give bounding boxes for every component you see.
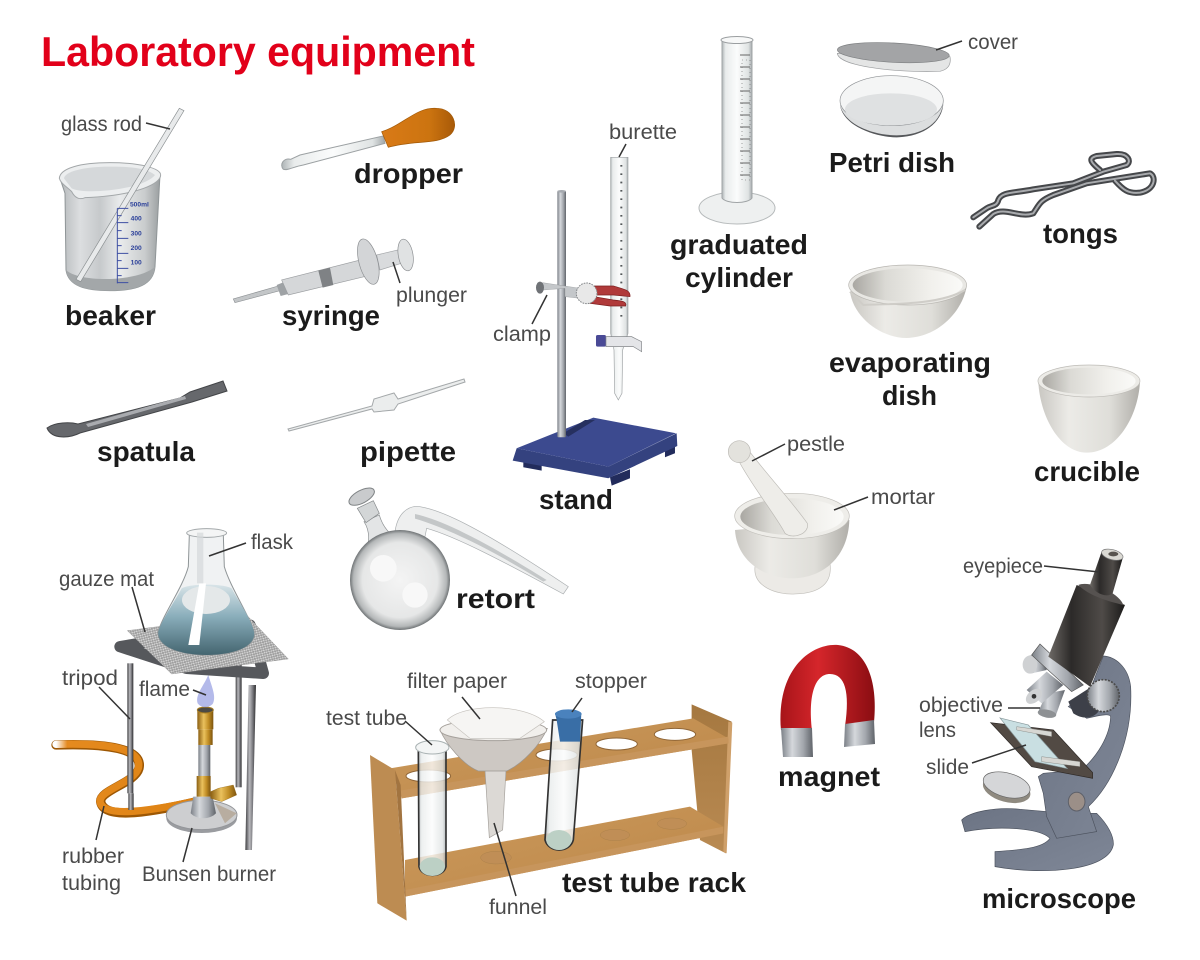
label: retort: retort	[456, 583, 535, 614]
icon: spatula	[47, 381, 227, 437]
label: gauze mat: gauze mat	[59, 568, 154, 591]
icon: Petri dish	[837, 40, 950, 137]
panel: tongs	[973, 154, 1154, 249]
nosepiece	[1032, 644, 1083, 692]
panel: pipette	[288, 379, 465, 467]
icon: horseshoe magnet	[781, 645, 875, 757]
label: burette	[609, 121, 677, 157]
icon: microscope	[962, 547, 1131, 871]
label: microscope: microscope	[982, 883, 1136, 914]
label: filter paper	[407, 670, 507, 719]
panel: evaporating dish	[829, 265, 991, 411]
label: Bunsen burner	[142, 828, 276, 886]
icon: crucible	[1038, 365, 1140, 453]
panel: spatula	[47, 381, 227, 467]
label: mortar	[834, 486, 935, 510]
icon: graduated cylinder	[699, 36, 775, 224]
test tube	[416, 741, 449, 876]
label: objective lens: objective	[919, 694, 1003, 717]
label: rubber tubing: rubber	[62, 845, 124, 868]
back tripod leg	[236, 663, 242, 787]
label: tripod: tripod	[62, 667, 118, 690]
label: graduated cylinder: graduated	[670, 229, 808, 260]
stage	[991, 718, 1093, 778]
label: beaker: beaker	[65, 300, 156, 331]
panel: burner, tripod and flask	[56, 529, 293, 895]
focus knob	[1087, 680, 1119, 712]
label: flask: flask	[251, 531, 293, 554]
burner tube	[197, 707, 237, 802]
panel: Petri dish	[829, 31, 1018, 178]
panel: beaker	[59, 108, 184, 331]
funnel and filter paper	[440, 708, 547, 838]
label: plunger: plunger	[396, 284, 467, 307]
label: syringe: syringe	[282, 300, 380, 331]
label: pestle: pestle	[787, 433, 845, 456]
label: mortar: mortar	[871, 486, 935, 509]
flask	[158, 529, 254, 655]
bottom shelf	[405, 807, 723, 897]
label: test tube: test tube	[326, 707, 407, 730]
objectives	[1023, 652, 1065, 719]
label: eyepiece	[963, 555, 1099, 578]
label: stopper: stopper	[575, 670, 647, 693]
title: Laboratory equipment	[41, 28, 475, 75]
icon: stand with burette	[513, 157, 677, 486]
icon: pipette	[288, 379, 465, 431]
label: slide: slide	[926, 756, 969, 779]
panel: graduated cylinder	[670, 36, 808, 293]
icon: evaporating dish	[849, 265, 967, 338]
label: test tube	[326, 707, 432, 745]
label: clamp: clamp	[493, 323, 551, 346]
label: pestle	[752, 433, 845, 461]
label: evaporating dish: dish	[882, 380, 937, 411]
icon: burner, tripod and flask assembly	[56, 529, 288, 850]
panel: mortar and pestle	[728, 433, 935, 594]
label: gauze mat	[59, 568, 154, 632]
tripod ring	[120, 625, 263, 673]
label: crucible: crucible	[1034, 456, 1140, 487]
gauze mat	[127, 615, 288, 674]
label: cover	[936, 31, 1018, 54]
microscope arm	[1038, 656, 1131, 838]
label: slide	[926, 745, 1026, 779]
panel: test tube rack	[326, 670, 746, 921]
icon: beaker with glass rod: 100	[131, 260, 142, 267]
label: rubber tubing: tubing	[62, 872, 121, 895]
tripod legs	[127, 663, 256, 850]
label: flask	[209, 531, 293, 556]
label: rubber tubing	[62, 806, 124, 895]
label: stand: stand	[539, 484, 613, 515]
panel: retort	[346, 485, 568, 630]
icon: beaker with glass rod: 500ml	[130, 202, 149, 209]
label: graduated cylinder	[670, 229, 808, 293]
label: pipette: pipette	[360, 436, 456, 467]
label: objective lens	[919, 694, 1040, 742]
label: funnel: funnel	[489, 896, 547, 919]
label: dropper: dropper	[354, 158, 463, 189]
icon: syringe	[233, 237, 416, 303]
panel: magnet	[778, 645, 880, 792]
icon: tongs	[973, 154, 1154, 227]
top shelf	[390, 718, 728, 798]
label: eyepiece: eyepiece	[963, 555, 1043, 578]
label: tongs: tongs	[1043, 218, 1118, 249]
label: test tube rack: test tube rack	[562, 867, 746, 898]
label: graduated cylinder: cylinder	[685, 262, 793, 293]
label: flame: flame	[139, 678, 190, 701]
icon: retort	[346, 485, 568, 630]
icon: mortar and pestle	[728, 441, 849, 594]
label: stopper	[572, 670, 647, 712]
mirror	[980, 767, 1033, 808]
label: spatula: spatula	[97, 436, 195, 467]
left end panel	[370, 755, 407, 921]
rubber tubing	[56, 744, 197, 813]
label: Bunsen burner: Bunsen burner	[142, 863, 276, 886]
label: filter paper: filter paper	[407, 670, 507, 693]
icon: beaker with glass rod	[59, 108, 184, 291]
label: glass rod: glass rod	[61, 113, 142, 136]
icon: beaker with glass rod: 400	[131, 216, 142, 223]
label: evaporating dish	[829, 347, 991, 411]
right end panel	[692, 704, 732, 853]
eyepiece	[1090, 547, 1124, 595]
body tube	[1048, 585, 1125, 687]
panel: microscope	[919, 547, 1136, 914]
panel: crucible	[1034, 365, 1140, 487]
microscope base	[962, 809, 1113, 871]
test tube with stopper	[545, 709, 583, 850]
icon: dropper	[282, 108, 455, 170]
burner base	[166, 797, 237, 833]
panel: syringe	[233, 237, 467, 331]
label: evaporating dish: evaporating	[829, 347, 991, 378]
icon: beaker with glass rod: 300	[131, 230, 142, 237]
label: plunger	[393, 262, 467, 307]
panel: stand	[493, 121, 677, 515]
label: clamp	[493, 295, 551, 346]
label: magnet: magnet	[778, 761, 880, 792]
label: objective lens: lens	[919, 719, 956, 742]
flame	[197, 675, 214, 707]
icon: test tube rack	[370, 704, 732, 921]
label: Petri dish: Petri dish	[829, 147, 955, 178]
label: burette: burette	[609, 121, 677, 144]
label: cover: cover	[968, 31, 1018, 54]
label: funnel	[489, 823, 547, 919]
panel: dropper	[282, 108, 463, 189]
icon: beaker with glass rod: 200	[131, 245, 142, 252]
label: tripod	[62, 667, 130, 719]
